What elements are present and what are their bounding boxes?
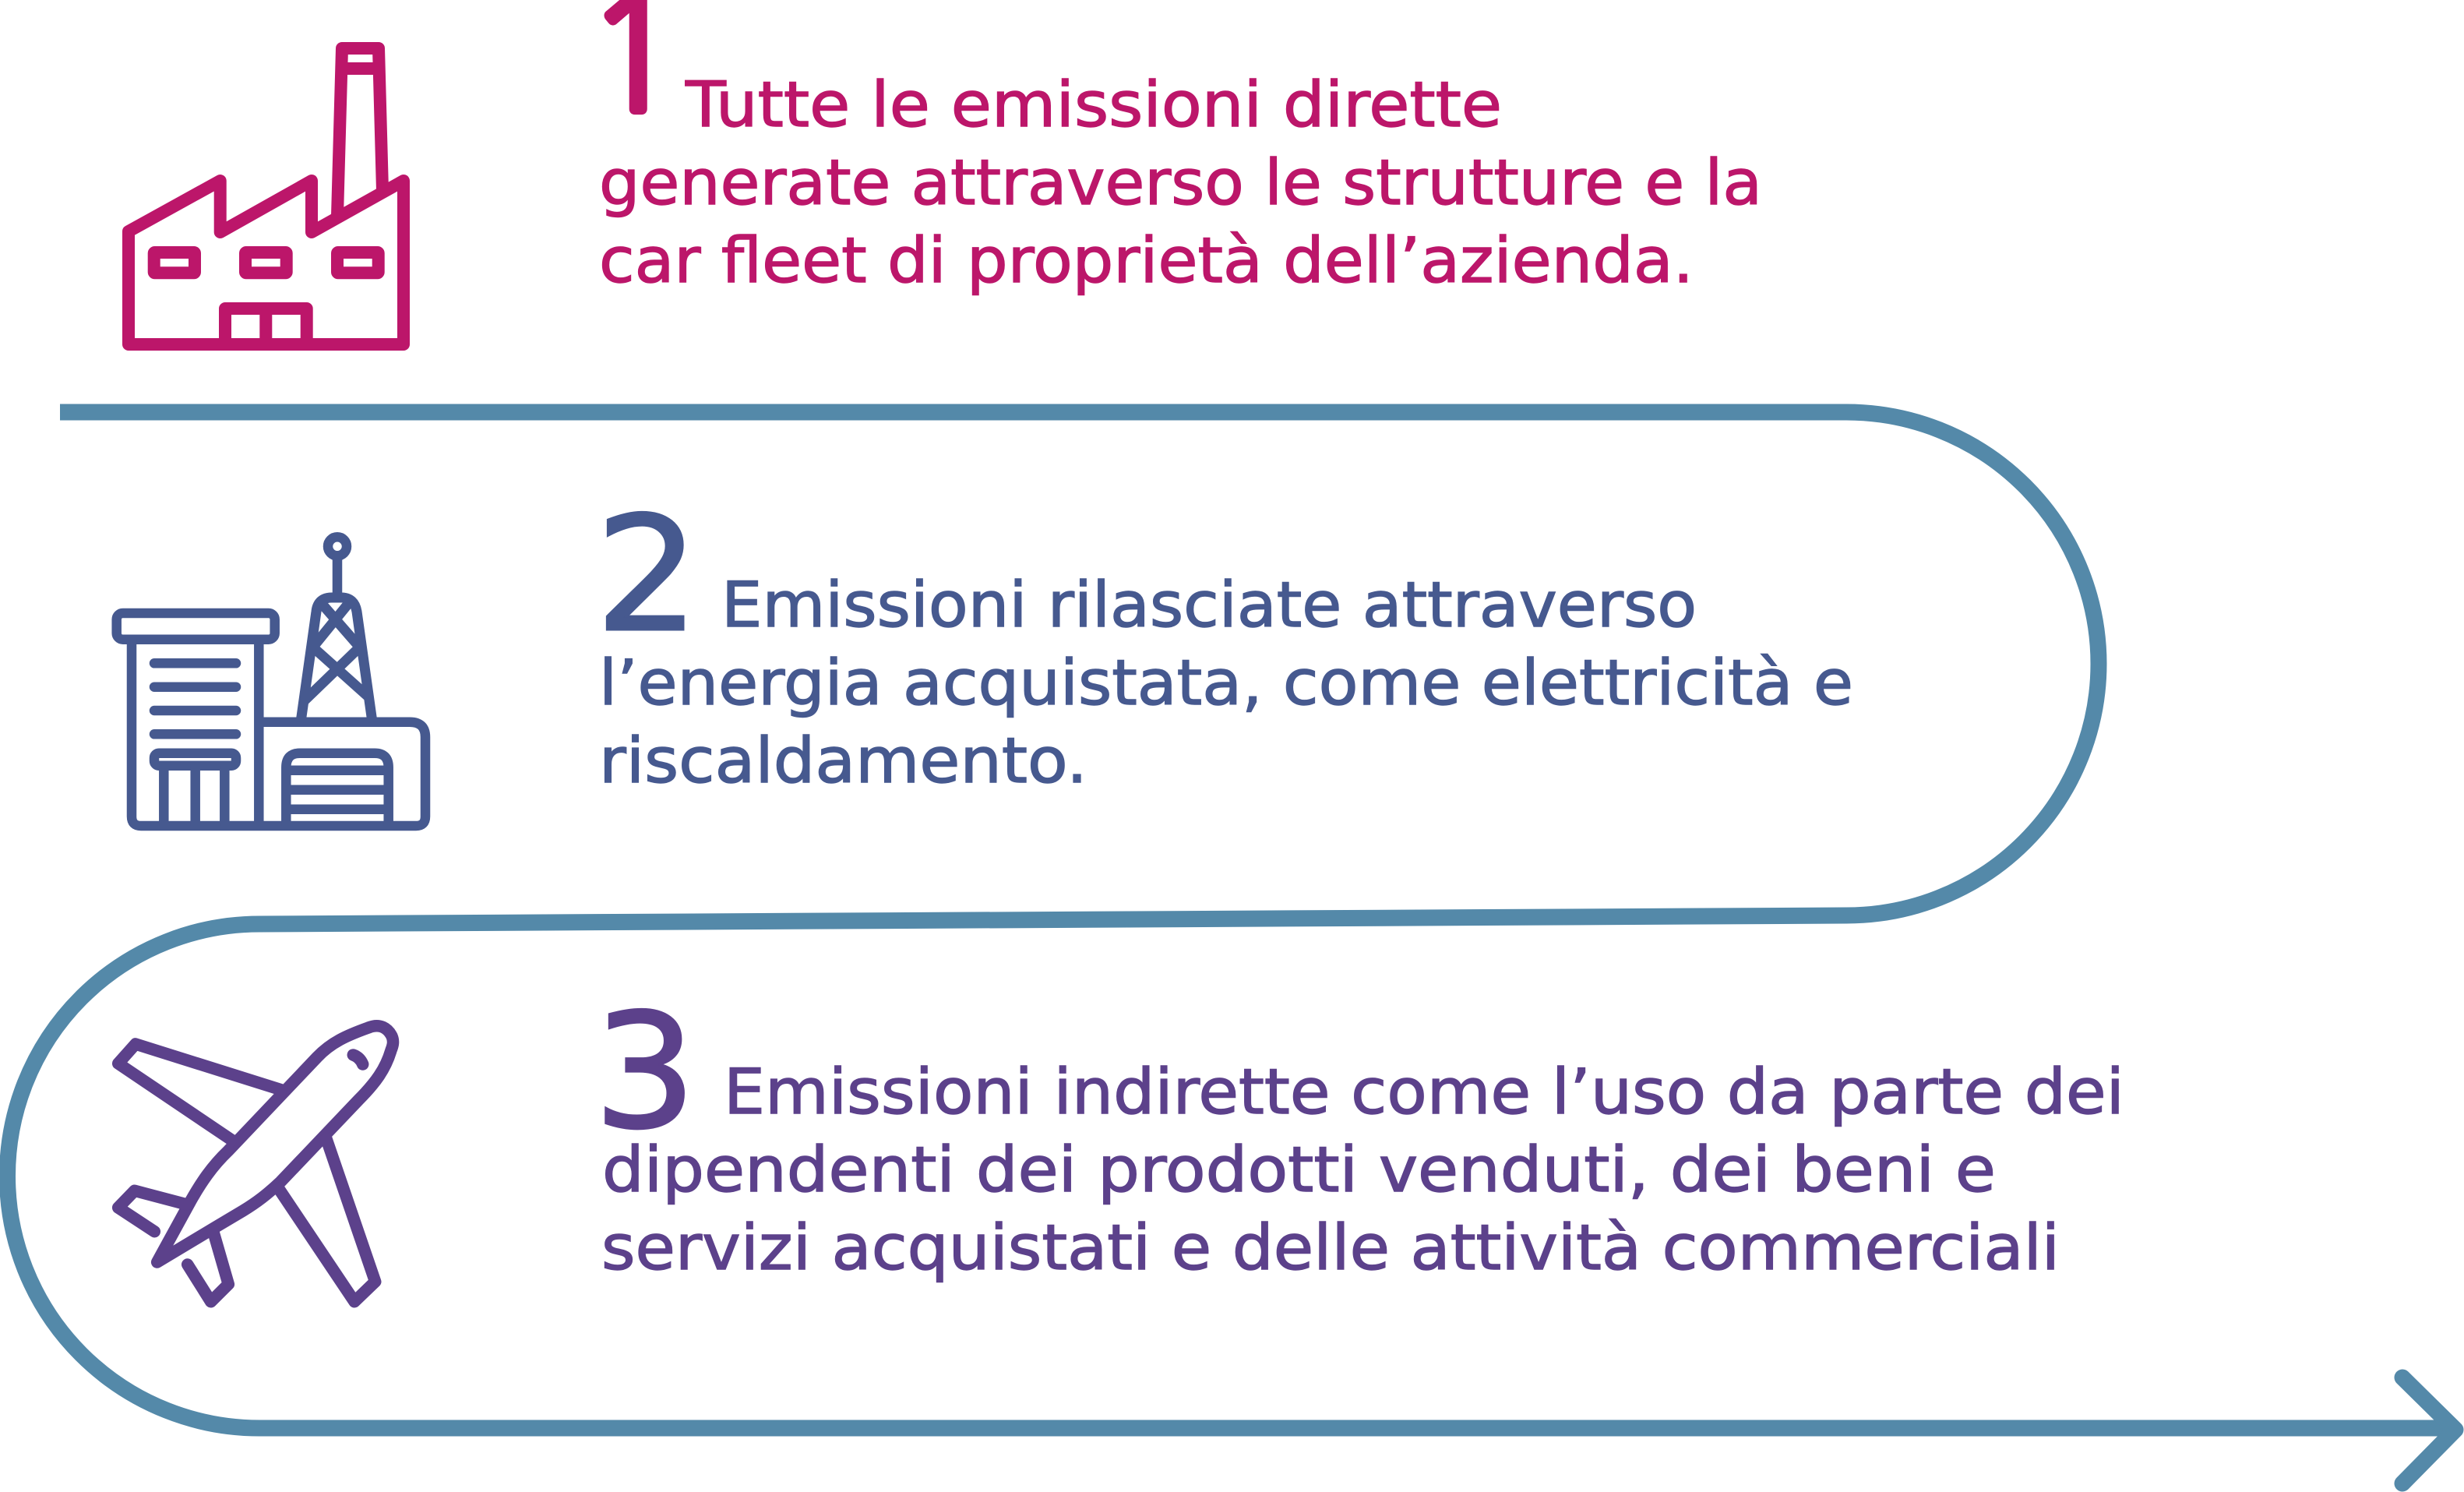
icon: office building and tower bbox=[117, 537, 425, 826]
step 3 text bbox=[594, 980, 2124, 1284]
description 1: car fleet di proprietà dell’azienda. bbox=[599, 224, 1694, 297]
description 1 bbox=[599, 69, 1762, 297]
description 2: l’energia acquistata, come elettricità e bbox=[599, 647, 1853, 719]
step 1 text bbox=[585, 0, 1762, 297]
number 3: 3 bbox=[594, 980, 696, 1164]
description 2 bbox=[599, 569, 1853, 797]
icon: factory bbox=[129, 48, 404, 344]
description 2: Emissioni rilasciate attraverso bbox=[721, 569, 1697, 641]
description 3: Emissioni indirette come l’uso da parte dei bbox=[724, 1056, 2124, 1128]
icon: airplane bbox=[118, 1026, 393, 1302]
description 3 bbox=[601, 1056, 2124, 1284]
winding arrow path bbox=[7, 412, 2455, 1483]
description 1: generate attraverso le strutture e la bbox=[599, 146, 1762, 219]
arrow head bbox=[2402, 1377, 2455, 1483]
number 2: 2 bbox=[595, 483, 700, 667]
description 2: riscaldamento. bbox=[599, 725, 1087, 797]
description 3: dipendenti dei prodotti venduti, dei beni e bbox=[602, 1134, 1996, 1206]
step 2 text bbox=[595, 483, 1853, 797]
description 3: servizi acquistati e delle attività commerciali bbox=[601, 1212, 2060, 1284]
description 1: Tutte le emissioni dirette bbox=[685, 69, 1502, 141]
